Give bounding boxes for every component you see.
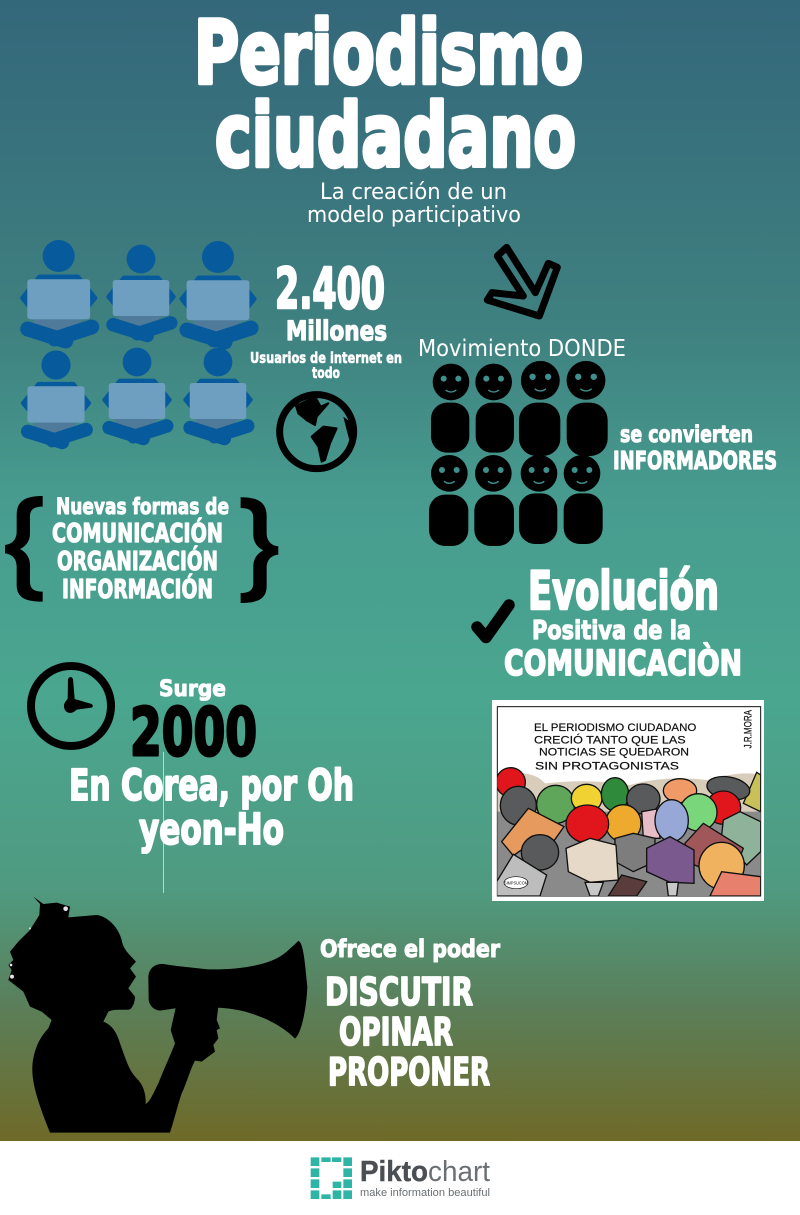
logo: Piktochart [311, 1156, 490, 1199]
text: surge 2000 [69, 677, 354, 855]
cartoon: periodismo ciudadano [492, 700, 764, 901]
icon: left brace [5, 496, 43, 602]
text: surge 2000: En Corea, por Oh [69, 761, 354, 811]
cartoon caption: NOTICIAS SE QUEDARON [539, 747, 689, 759]
cartoon caption: CRECIÓ TANTO QUE LAS [534, 734, 686, 747]
cartoon caption: J.R.MORA [743, 710, 755, 748]
icon: globe [280, 395, 354, 469]
text: evolución [504, 561, 742, 684]
statistic: internet users: Millones [286, 316, 387, 347]
text: se convierten informadores: se convierten [620, 422, 753, 448]
title: ciudadano [215, 85, 576, 187]
icon group: people with laptops [23, 240, 254, 442]
logo mark [311, 1157, 352, 1199]
statistic: internet users: Usuarios de internet en [250, 349, 402, 367]
title [194, 2, 583, 187]
title: Periodismo [194, 2, 583, 104]
icon: clock [31, 666, 111, 746]
statistic: internet users: todo [312, 364, 340, 382]
text: ofrece el poder: Ofrece el poder [320, 935, 500, 963]
text: evolución: Positiva de la [532, 616, 691, 646]
heading: Movimiento DONDE: Movimiento DONDE [418, 336, 626, 362]
text: surge 2000: yeon-Ho [139, 805, 284, 855]
cartoon caption: SIN PROTAGONISTAS [535, 761, 679, 773]
icon: right brace [241, 497, 278, 603]
text: nuevas formas: Nuevas formas de [56, 495, 229, 520]
cartoon crowd of microphones [496, 768, 761, 896]
text: surge 2000: 2000 [130, 694, 257, 771]
cartoon logo stamp: SIMPSUCOM [504, 881, 528, 887]
text: surge 2000: Surge [159, 677, 226, 702]
text: nuevas formas [52, 495, 229, 605]
logo wordmark: Pikto [360, 1156, 428, 1188]
text: nuevas formas: INFORMACIÓN [62, 573, 213, 605]
logo tagline: make information beautiful [360, 1187, 490, 1199]
text: ofrece el poder [320, 935, 500, 1094]
text: ofrece el poder: DISCUTIR [325, 970, 473, 1014]
text: ofrece el poder: PROPONER [328, 1050, 490, 1094]
text: nuevas formas: COMUNICACIÓN [52, 517, 223, 549]
subtitle: La creación de un [320, 180, 507, 205]
footer band [0, 1141, 800, 1215]
subtitle: modelo participativo [307, 203, 521, 228]
logo: Piktochart: chart [428, 1156, 490, 1188]
subtitle [307, 180, 521, 228]
text: ofrece el poder: OPINAR [339, 1010, 453, 1054]
icon: arrow [487, 247, 557, 316]
cartoon caption [534, 710, 755, 773]
thin vertical line [163, 752, 164, 893]
silhouette: woman with megaphone [8, 897, 307, 1133]
statistic: internet users: 2.400 [275, 257, 385, 322]
icon: check mark [477, 605, 509, 638]
statistic: internet users [250, 257, 402, 382]
icon group: smiling people [429, 361, 608, 546]
text: se convierten informadores [613, 422, 777, 475]
cartoon logo stamp [504, 877, 528, 889]
text: nuevas formas: ORGANIZACIÓN [57, 545, 218, 577]
cartoon caption: EL PERIODISMO CIUDADANO [534, 722, 697, 734]
